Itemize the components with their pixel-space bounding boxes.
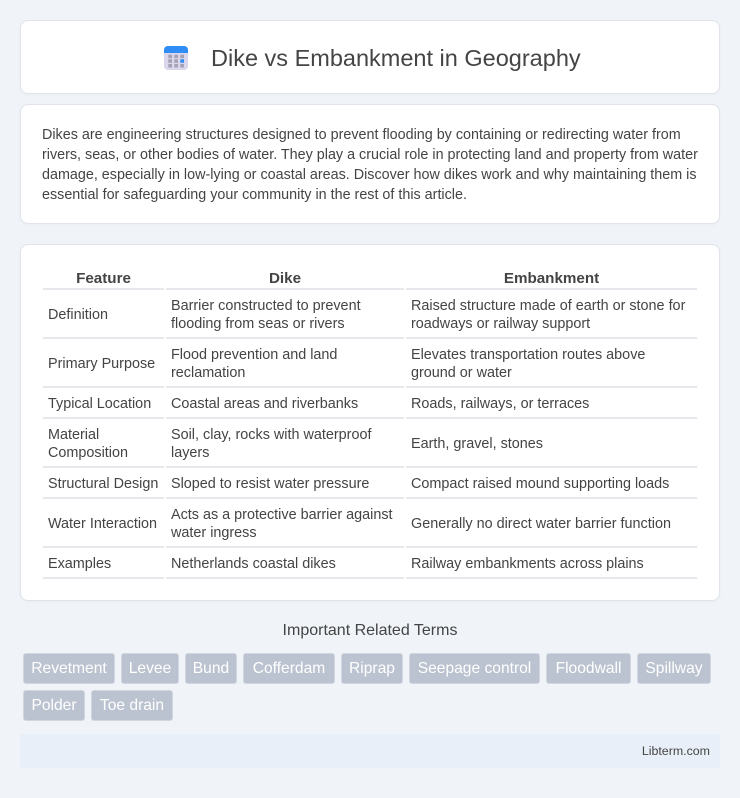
cell: Primary Purpose, Embankment: ground or water: [411, 365, 512, 381]
cell: Water Interaction, Dike: Acts as a protective barrier against: [171, 507, 393, 523]
cell: Material Composition, Dike: Soil, clay, rocks with waterproof: [171, 427, 371, 443]
icon: calendar: [164, 46, 188, 70]
cell: Primary Purpose, Dike: reclamation: [171, 365, 245, 381]
tag: Levee: [121, 653, 179, 684]
cell: Primary Purpose, Dike: [171, 347, 337, 381]
cell: Definition, Embankment: Raised structure made of earth or stone for: [411, 298, 685, 314]
tag: Floodwall: [546, 653, 631, 684]
row: Examples: Examples: [48, 556, 111, 572]
tag: Bund: [185, 653, 237, 684]
cell: Material Composition, Dike: layers: [171, 445, 209, 461]
table header: Embankment: Embankment: [504, 270, 599, 287]
cell: Examples, Embankment: Railway embankments across plains: [411, 556, 644, 572]
tag: Polder: Polder: [31, 697, 77, 714]
tag: Cofferdam: [243, 653, 335, 684]
cell: Definition, Embankment: [411, 298, 686, 332]
row: Definition: Definition: [48, 307, 108, 323]
cell: Definition, Embankment: roadways or railway support: [411, 316, 590, 332]
cell: Material Composition, Embankment: Earth, gravel, stones: [411, 436, 543, 452]
tag: Polder: [23, 690, 85, 721]
tag: Revetment: [23, 653, 115, 684]
row: Primary Purpose: Primary Purpose: [48, 356, 155, 372]
cell: Structural Design, Embankment: Compact raised mound supporting loads: [411, 476, 669, 492]
row: Material Composition: Composition: [48, 445, 128, 461]
tag: Spillway: [637, 653, 711, 684]
heading: related terms: Important Related Terms: [283, 622, 457, 639]
tag: Riprap: [341, 653, 403, 684]
cell: Water Interaction, Dike: [171, 507, 393, 541]
text block: introduction: Dikes are engineering structures designed to prevent flooding by containing or redirecting water from: [42, 127, 681, 143]
cell: Definition, Dike: Barrier constructed to prevent: [171, 298, 361, 314]
cell: Definition, Dike: [171, 298, 361, 332]
panel: introduction: [20, 104, 720, 224]
panel: comparison table: [20, 244, 720, 601]
tag: Bund: Bund: [193, 660, 229, 677]
text block: introduction: essential for safeguarding your community in the rest of this article.: [42, 187, 467, 203]
cell: Water Interaction, Dike: water ingress: [171, 525, 257, 541]
row: Water Interaction: Water Interaction: [48, 516, 157, 532]
tag: Levee: Levee: [129, 660, 171, 677]
cell: Definition, Dike: flooding from seas or rivers: [171, 316, 345, 332]
tag: Toe drain: Toe drain: [100, 697, 164, 714]
cell: Typical Location, Embankment: Roads, railways, or terraces: [411, 396, 589, 412]
tag: Spillway: Spillway: [645, 660, 703, 677]
cell: Examples, Dike: Netherlands coastal dikes: [171, 556, 336, 572]
table header: Feature: Feature: [76, 270, 131, 287]
table header: Dike: Dike: [269, 270, 301, 287]
cell: Primary Purpose, Embankment: [411, 347, 645, 381]
tag: Riprap: Riprap: [349, 660, 395, 677]
text block: introduction: damage, especially in low-lying or coastal areas. Discover how dikes work and why maintaining them is: [42, 167, 697, 183]
row: Typical Location: Typical Location: [48, 396, 151, 412]
tag: Revetment: Revetment: [31, 660, 107, 677]
cell: Primary Purpose, Dike: Flood prevention and land: [171, 347, 337, 363]
panel: title card: [20, 20, 720, 94]
cell: Typical Location, Dike: Coastal areas and riverbanks: [171, 396, 358, 412]
row: Material Composition: [48, 427, 128, 461]
tag: Cofferdam: Cofferdam: [253, 660, 325, 677]
footer: [20, 734, 720, 768]
row: Structural Design: Structural Design: [48, 476, 158, 492]
cell: Structural Design, Dike: Sloped to resist water pressure: [171, 476, 369, 492]
text block: introduction: rivers, seas, or other bodies of water. They play a crucial role in protecting land and property from water: [42, 147, 698, 163]
cell: Water Interaction, Embankment: Generally no direct water barrier function: [411, 516, 671, 532]
row: Material Composition: Material: [48, 427, 99, 443]
title: Dike vs Embankment in Geography: [211, 45, 581, 71]
footer credit: Libterm.com: [642, 744, 710, 758]
cell: Primary Purpose, Embankment: Elevates transportation routes above: [411, 347, 645, 363]
text block: introduction: [42, 127, 698, 203]
tag: Floodwall: Floodwall: [556, 660, 621, 677]
cell: Material Composition, Dike: [171, 427, 372, 461]
tag: Seepage control: Seepage control: [418, 660, 531, 677]
tag: Toe drain: [91, 690, 173, 721]
tag: Seepage control: [409, 653, 540, 684]
